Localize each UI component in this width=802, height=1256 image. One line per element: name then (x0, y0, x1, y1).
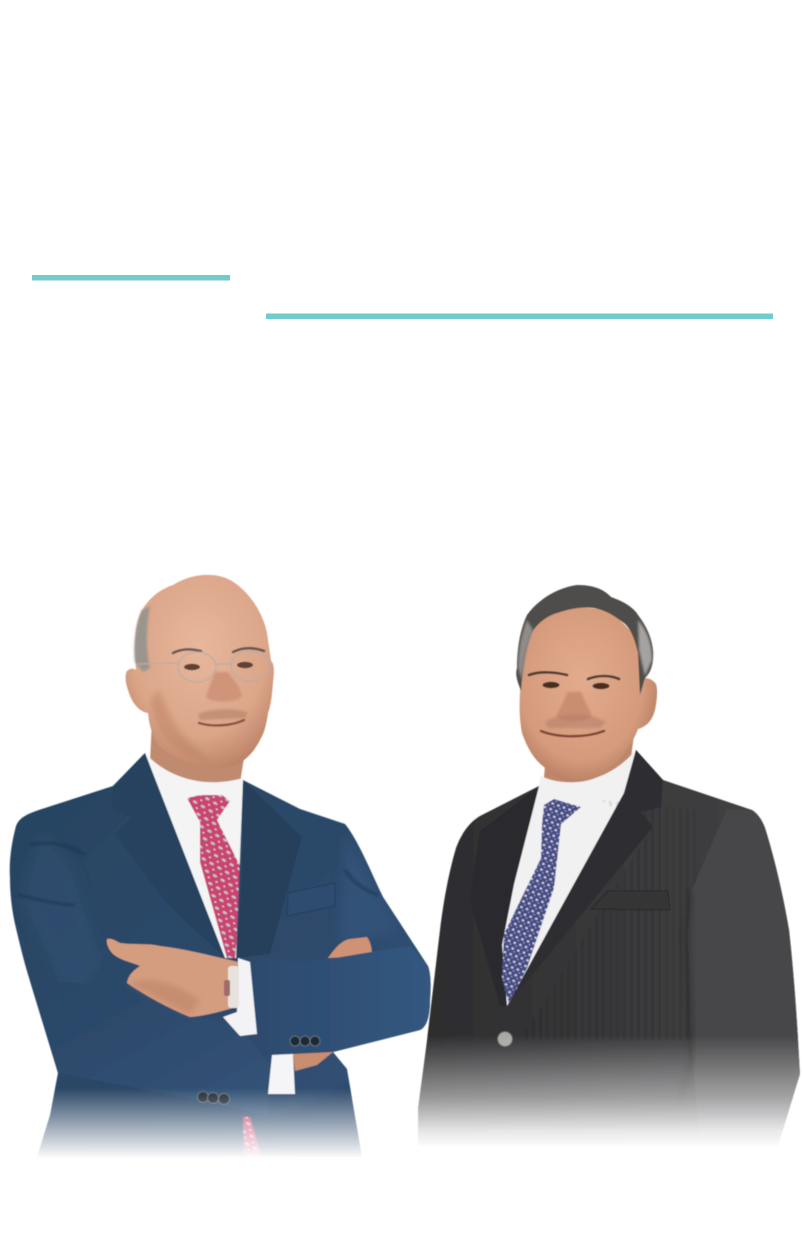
grey temples (638, 620, 652, 676)
arm shadow (680, 892, 692, 1100)
bottom fade (0, 1088, 430, 1159)
pocket (591, 891, 670, 910)
glasses (137, 651, 271, 682)
crossed right sleeve (240, 946, 431, 1055)
shirt (145, 753, 243, 960)
accent bar: right (266, 314, 773, 319)
accent bar: left (32, 275, 230, 280)
jacket pocket (287, 883, 335, 916)
jacket (418, 750, 800, 1146)
jacket (10, 753, 431, 1160)
right lapel (507, 750, 663, 1006)
nose (556, 692, 592, 721)
moustache shadow (198, 709, 248, 720)
left grey temple (518, 620, 533, 680)
sleeve (688, 809, 800, 1146)
sleeve wrinkles (18, 843, 378, 905)
upper sleeve buttons (290, 1036, 320, 1046)
head (516, 585, 657, 782)
illustration: accent bars and two portraits (8, 275, 800, 1156)
hair (516, 585, 653, 695)
eyes (184, 662, 253, 670)
left lapel (470, 786, 539, 1006)
herringbone stripes (520, 800, 700, 1040)
portrait: man in navy suit (0, 575, 431, 1160)
head (126, 575, 274, 768)
nose (206, 672, 242, 702)
jacket button (498, 1032, 512, 1046)
eyebrows (529, 672, 619, 679)
lower hand (293, 1052, 333, 1071)
crossed hand (107, 939, 238, 1017)
body shadow (54, 1074, 352, 1106)
portrait: man in charcoal suit (414, 585, 802, 1148)
bottom fade (414, 1035, 802, 1148)
right side highlight (344, 850, 388, 936)
lower sleeve buttons (198, 1092, 230, 1104)
eyes (542, 682, 610, 689)
crossed left sleeve (30, 981, 270, 1115)
eyebrows (173, 648, 264, 653)
hand shading (128, 980, 200, 1015)
shirt (502, 752, 640, 1006)
neck (543, 735, 634, 798)
tie tip (243, 1117, 262, 1157)
jacket left lapel (112, 753, 225, 958)
mouth (541, 731, 604, 736)
face shading (150, 690, 215, 764)
tie (502, 799, 581, 1004)
neck (150, 720, 246, 795)
lower shirt cuff (268, 1054, 295, 1094)
mouth (199, 720, 244, 725)
smile shading (545, 714, 606, 728)
hair side (134, 606, 150, 672)
watch (224, 966, 239, 1008)
upper shirt cuff (223, 958, 257, 1036)
right hand fingers (328, 937, 372, 958)
tie (187, 795, 240, 958)
jacket right lapel (237, 780, 302, 958)
arm shadow (28, 846, 82, 957)
